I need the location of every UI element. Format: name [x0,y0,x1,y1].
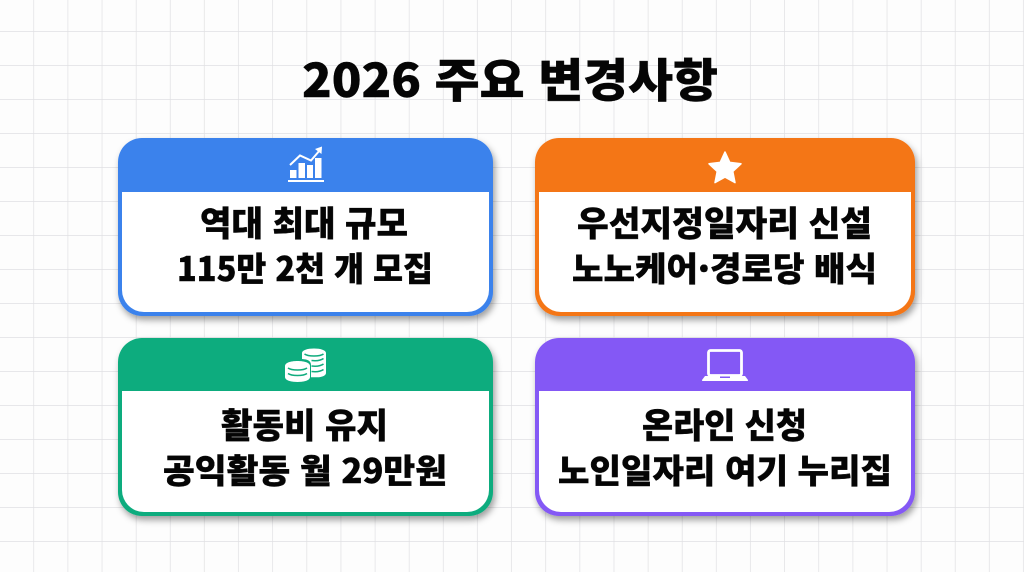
heading: 활동비 유지: 활동비 유지 [221,398,388,448]
panel: 온라인 신청 [535,338,915,516]
panel: 우선지정일자리 신설 [535,138,915,316]
icon: star [709,152,741,183]
title: 2026 주요 변경사항 [302,45,718,111]
icon: coin stacks [285,348,326,382]
panel: 활동비 유지 [118,338,493,516]
heading: 온라인 신청: 온라인 신청 [642,398,807,448]
heading: 우선지정일자리 신설: 우선지정일자리 신설 [577,196,872,246]
text: 115만 2천 개 모집: 115만 2천 개 모집 [177,242,433,291]
text: 공익활동 월 29만원: 공익활동 월 29만원 [163,444,447,493]
text: 노노케어·경로당 배식: 노노케어·경로당 배식 [572,242,877,291]
text: 노인일자리 여기 누리집: 노인일자리 여기 누리집 [558,444,892,493]
icon: laptop [702,350,748,381]
panel: 역대 최대 규모 [118,138,493,316]
heading: 역대 최대 규모: 역대 최대 규모 [200,196,408,246]
icon: rising bar chart [288,146,324,182]
